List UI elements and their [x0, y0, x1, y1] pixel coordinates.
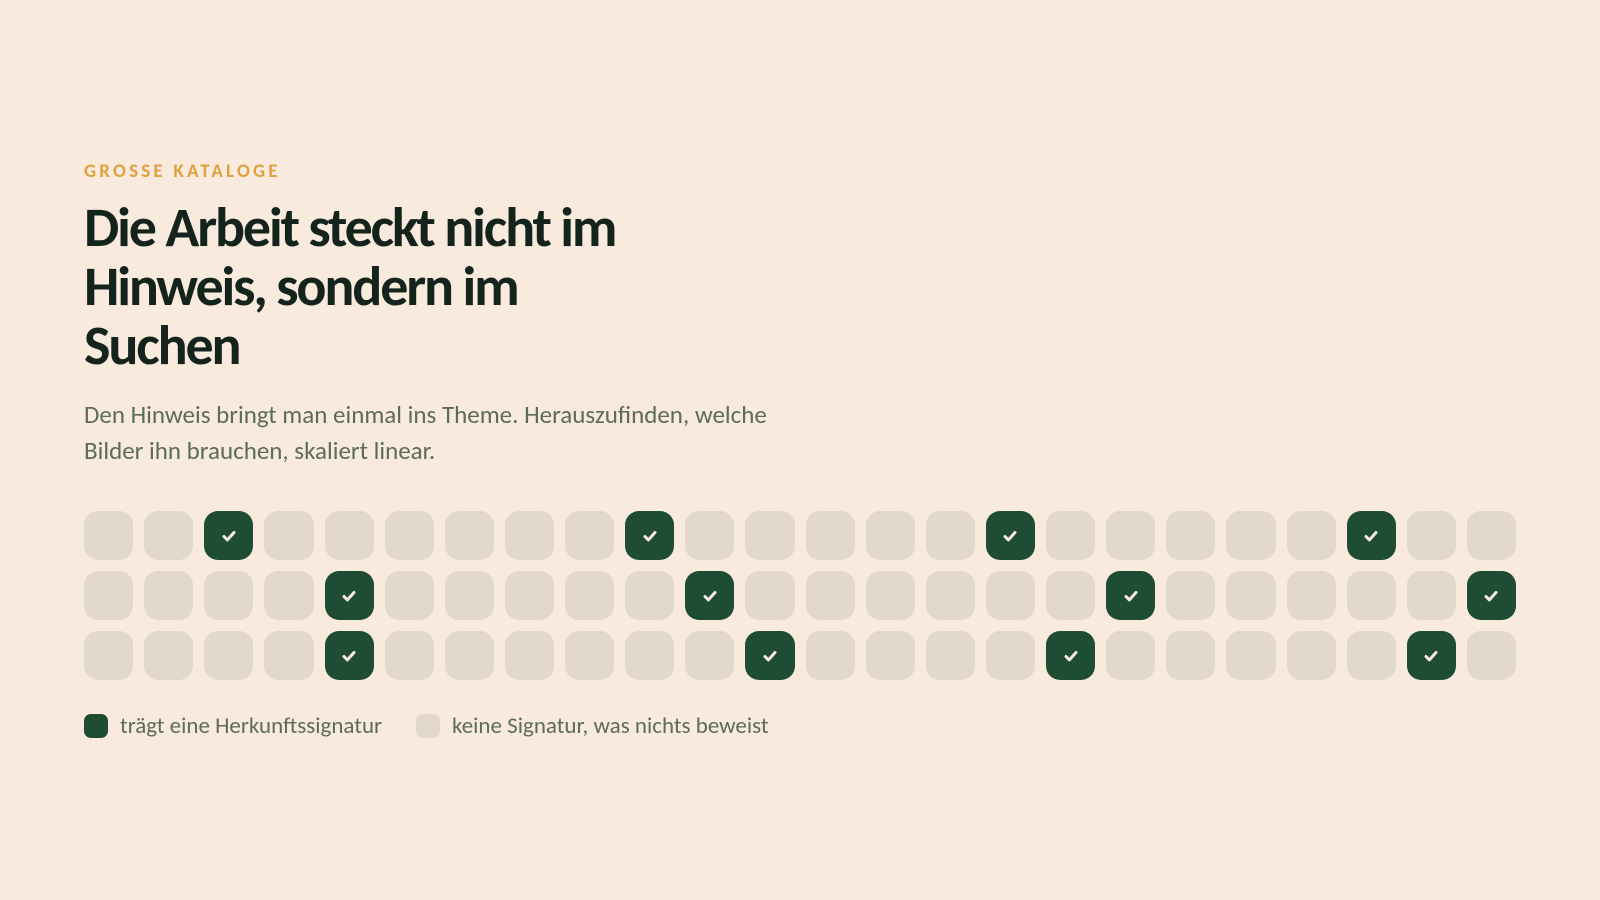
- title: [84, 194, 615, 380]
- title: Die Arbeit steckt nicht im: [84, 194, 615, 262]
- legend swatch: signed: [84, 714, 108, 738]
- title: Suchen: [84, 312, 239, 380]
- legend swatch: unsigned: [416, 714, 440, 738]
- subtitle text: [84, 399, 767, 466]
- legend label: signed: trägt eine Herkunftssignatur: [120, 712, 382, 740]
- title: Hinweis, sondern im: [84, 253, 518, 321]
- subtitle text: Bilder ihn brauchen, skaliert linear.: [84, 435, 435, 466]
- legend label: unsigned: keine Signatur, was nichts beweist: [452, 712, 769, 740]
- eyebrow heading: GROSSE KATALOGE: [84, 160, 281, 183]
- legend: [84, 712, 769, 740]
- waffle grid of catalogue images: [84, 511, 1516, 680]
- subtitle text: Den Hinweis bringt man einmal ins Theme. Herauszufinden, welche: [84, 399, 767, 430]
